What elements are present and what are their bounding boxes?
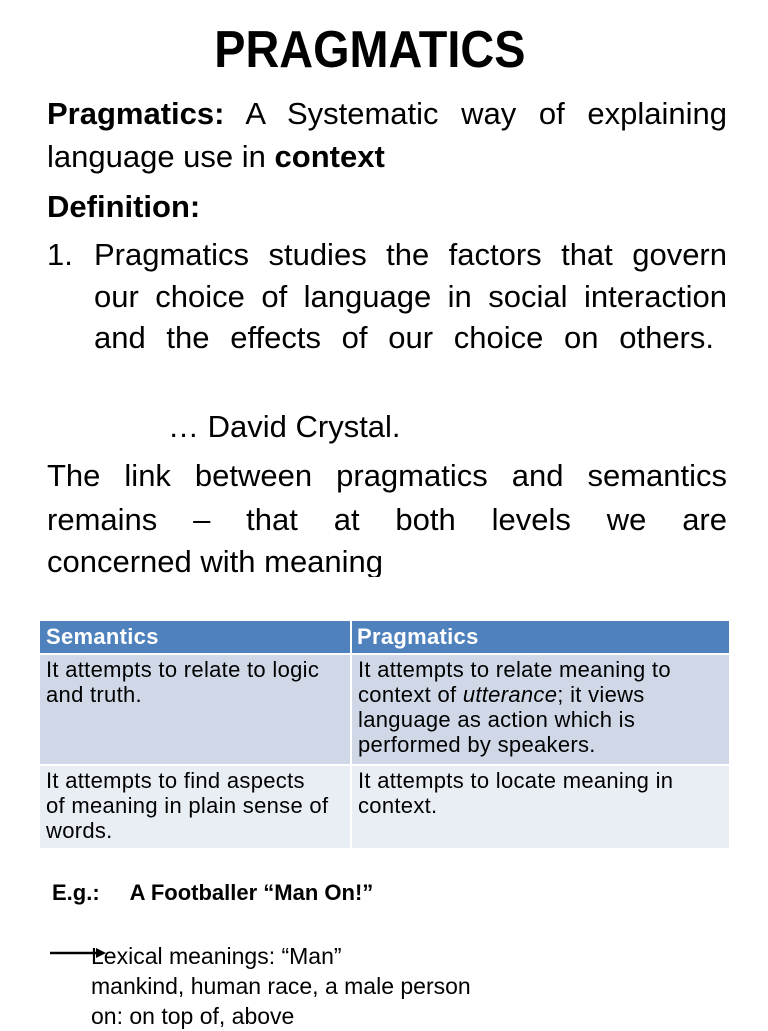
link paragraph: remains – that at both levels we are [47,502,727,537]
row 2: It attempts to find aspects [46,768,305,793]
table header [40,621,729,653]
definition item: 1. [47,237,73,272]
table: semantics vs pragmatics: context. [358,793,437,818]
row 1 [46,657,319,707]
table: semantics vs pragmatics: It attempts to locate meaning in [358,768,673,793]
row 2: words. [46,818,113,843]
definition item [47,237,727,355]
row 1: It attempts to relate to logic [46,657,319,682]
definition item: Pragmatics studies the factors that govern [94,237,727,272]
example heading: E.g.: A Footballer “Man On!” [52,880,373,905]
table: semantics vs pragmatics: context of utterance; it views [358,682,645,707]
row 2 [46,768,328,843]
intro text: Pragmatics: A Systematic way of explaining [47,96,727,131]
arrow [50,948,106,958]
table: semantics vs pragmatics: performed by speakers. [358,732,596,757]
example text [91,943,471,1029]
text: language use in context [47,139,385,174]
table: semantics vs pragmatics: Semantics [46,624,159,649]
example text: Lexical meanings: “Man” [91,943,342,969]
table: semantics vs pragmatics: Pragmatics [357,624,479,649]
definition heading: Definition: [47,189,200,224]
example text: on: on top of, above [91,1003,294,1029]
link paragraph [47,460,727,577]
definition item: and the effects of our choice on others. [94,320,714,355]
table: semantics vs pragmatics: language as action which is [358,707,635,732]
example text: mankind, human race, a male person [91,973,471,999]
title: PRAGMATICS [214,21,526,79]
definition item: our choice of language in social interaction [94,279,727,314]
table: semantics vs pragmatics [40,621,729,848]
table: semantics vs pragmatics: It attempts to relate meaning to [358,657,671,682]
attribution: … David Crystal. [168,409,401,444]
row 2: of meaning in plain sense of [46,793,328,818]
row 1: and truth. [46,682,142,707]
